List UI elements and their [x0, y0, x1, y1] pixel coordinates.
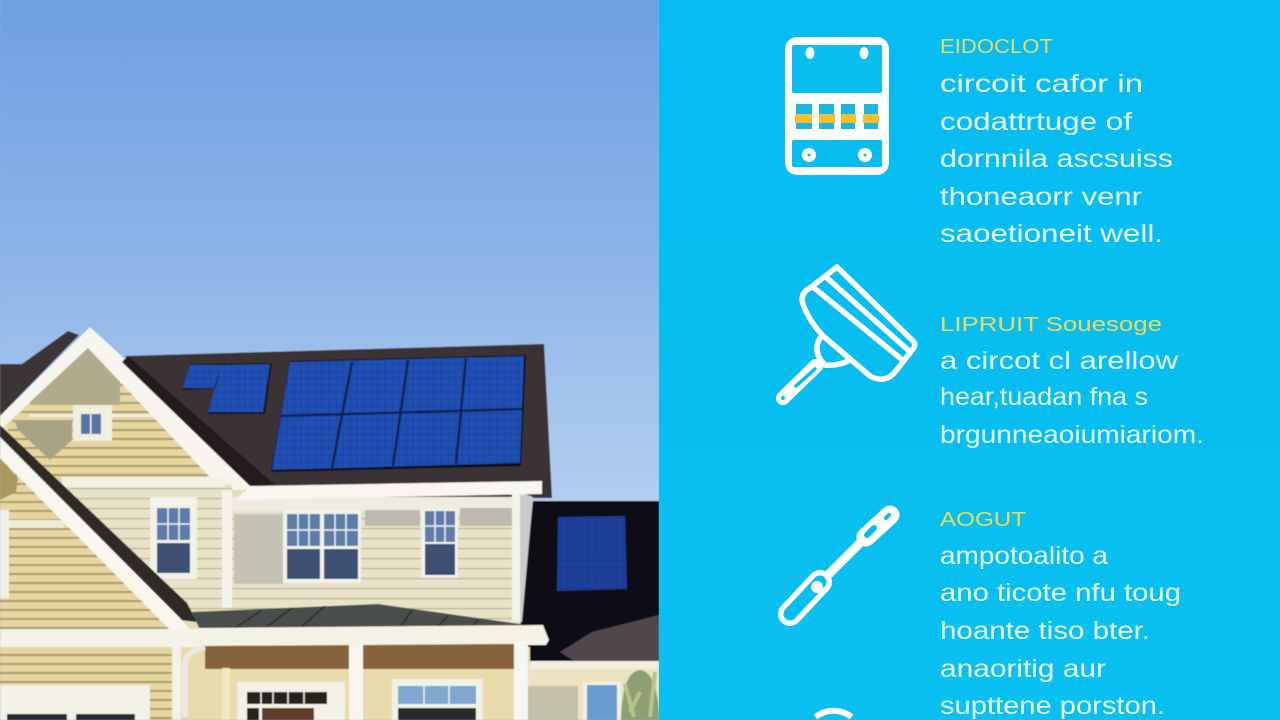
text block: two: hear,tuadan fna s: [940, 383, 1148, 411]
text block: one: thoneaorr venr: [940, 183, 1142, 211]
text block: three: [940, 542, 1181, 720]
left window: [150, 497, 197, 579]
lower gable roof band: [0, 425, 197, 622]
text block: three: anaoritig aur: [940, 655, 1106, 683]
panel: blue sidebar: [659, 0, 1280, 720]
text block: three: hoante tiso bter.: [940, 617, 1150, 645]
icon: squeegee: [781, 267, 915, 400]
text block: one: circoit cafor in: [940, 70, 1143, 98]
porch fascia: [198, 625, 549, 646]
house base fill: [0, 345, 530, 720]
sky: [0, 0, 659, 510]
photo: house with solar panels under blue sky: [0, 0, 659, 720]
icon: partial circle at bottom: [816, 711, 852, 717]
text block: three: supttene porston.: [940, 692, 1165, 720]
icon: screwdriver: [790, 515, 890, 614]
shrub: [621, 670, 659, 720]
text block: one: codattrtuge of: [940, 108, 1132, 136]
text block: one: dornnila ascsuiss: [940, 145, 1173, 173]
lower-left wall: [62, 477, 232, 609]
gable window: [73, 405, 112, 441]
lower gable white trim: [0, 437, 202, 650]
text block: one: saoetioneit well.: [940, 220, 1163, 248]
upper wall: [232, 497, 514, 627]
center double window: [283, 510, 361, 583]
right window: [421, 508, 458, 578]
upper gable wall: [8, 345, 225, 480]
gable white trim: [0, 327, 254, 490]
solar panels: small upper pair: [183, 363, 272, 414]
text block: one: [940, 70, 1173, 248]
text block: two: a circot cl arellow: [940, 347, 1179, 375]
porch columns: [349, 641, 528, 720]
front door: [237, 682, 345, 720]
left dark roof: [0, 331, 79, 416]
heading: block three: AOGUT: [940, 509, 1026, 531]
dark roof strip right of gable: [122, 356, 275, 486]
horizontal white band: [0, 629, 200, 647]
lower gable siding: [0, 458, 172, 630]
icon: circuit breaker: [785, 37, 889, 175]
right dark roof section: [520, 501, 659, 664]
porch window: [392, 679, 483, 720]
lower-left siding: [0, 647, 172, 720]
solar panel array: large main: [271, 355, 526, 472]
text block: two: [940, 347, 1204, 449]
porch wall and ceiling: [172, 644, 530, 720]
heading: block two: LIPRUIT Souesoge: [940, 314, 1162, 336]
ground-floor window block: [0, 685, 150, 720]
garage wing: [528, 661, 659, 720]
porch metal roof: [192, 604, 520, 630]
photo backing: [0, 0, 659, 720]
text block: three: ano ticote nfu toug: [940, 579, 1181, 607]
text block: two: brgunneaoiumiariom.: [940, 421, 1204, 449]
solar panel: right roof: [557, 516, 627, 591]
heading: block one: EIDOCLOT: [940, 36, 1053, 58]
main dark roof: [125, 344, 552, 498]
text block: three: ampotoalito a: [940, 542, 1108, 570]
main eave: [235, 481, 542, 500]
